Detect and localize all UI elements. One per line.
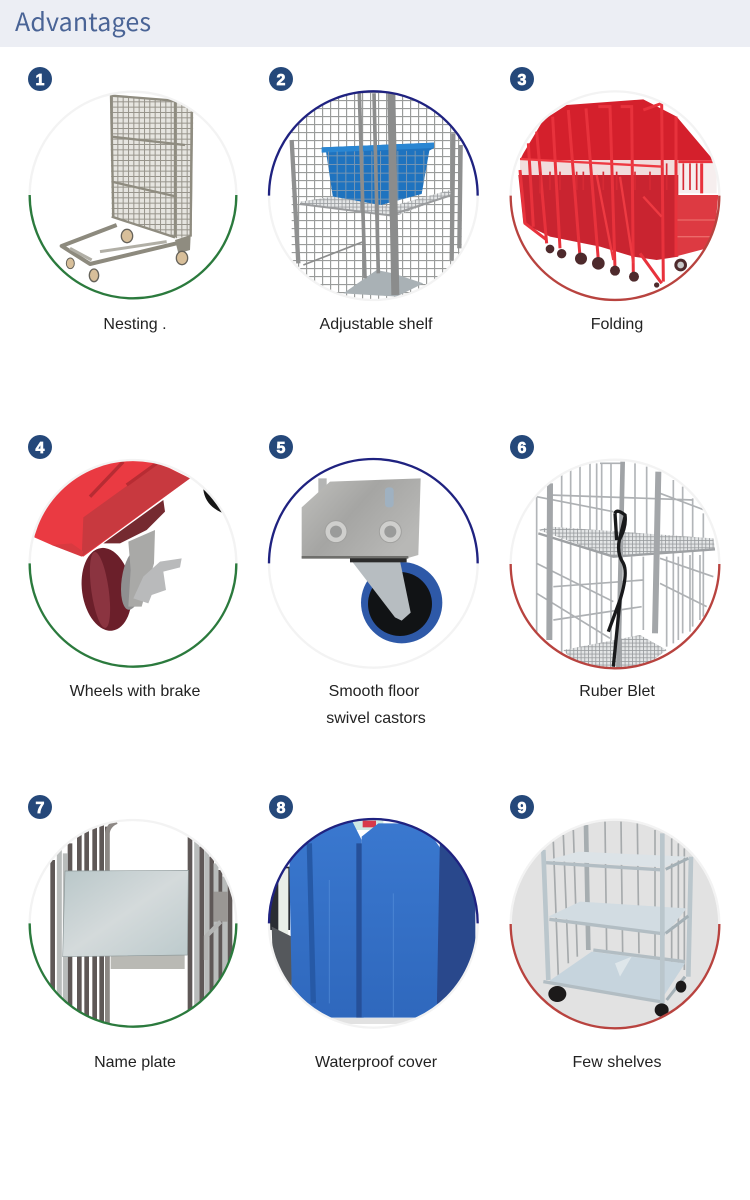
photo: metal name plate [53, 822, 230, 1030]
panel: rubber belt [510, 435, 719, 700]
photo: folded nesting cart [62, 95, 193, 282]
panel: wheels with brake [28, 435, 236, 700]
number badge 7 [28, 795, 52, 819]
number badge 2 [269, 67, 293, 91]
photo: red cart brake wheel [33, 457, 230, 634]
title: Advantages [15, 3, 151, 39]
number badge 8: 8 [277, 800, 286, 817]
label: Folding [591, 316, 643, 333]
ring [511, 460, 719, 668]
ring [30, 820, 236, 1027]
panel: name plate [28, 795, 236, 1071]
label: Nesting . [103, 316, 167, 333]
number badge 5 [269, 435, 293, 459]
label: Waterproof cover [315, 1054, 438, 1071]
ring [30, 92, 236, 298]
ring [269, 459, 478, 668]
label: Smooth floor [329, 683, 420, 700]
photo: blue swivel castor [302, 478, 442, 643]
photo: three-shelf cart [510, 820, 720, 1030]
ring [511, 91, 719, 300]
ring [511, 820, 719, 1028]
label: swivel castors [326, 710, 426, 727]
panel: adjustable shelf [269, 67, 478, 333]
photo: row of folded red carts [518, 99, 718, 288]
photo: blue crate on shelf [292, 90, 462, 300]
number badge 3 [510, 67, 534, 91]
number badge 6 [510, 435, 534, 459]
label [326, 683, 426, 727]
panel: few shelves [510, 795, 720, 1071]
number badge 1: 1 [36, 72, 45, 89]
number badge 3: 3 [518, 72, 527, 89]
ring [269, 91, 478, 300]
photo: wire cage with black strap [537, 462, 715, 670]
number badge 6: 6 [518, 440, 527, 457]
label: Adjustable shelf [320, 316, 433, 333]
number badge 7: 7 [36, 800, 45, 817]
ring [269, 819, 478, 1028]
label: Ruber Blet [579, 683, 655, 700]
number badge 9 [510, 795, 534, 819]
number badge 8 [269, 795, 293, 819]
photo: blue waterproof cover [267, 817, 480, 1030]
panel: nesting [28, 67, 236, 333]
number badge 4: 4 [36, 440, 45, 457]
number badge 4 [28, 435, 52, 459]
number badge 2: 2 [277, 72, 286, 89]
label: Name plate [94, 1054, 176, 1071]
number badge 5: 5 [277, 440, 286, 457]
label: Few shelves [573, 1054, 661, 1071]
header band [0, 0, 750, 47]
ring [30, 460, 236, 667]
panel: folding [510, 67, 719, 333]
panel: waterproof cover [267, 795, 480, 1071]
number badge 9: 9 [518, 800, 527, 817]
label: Wheels with brake [70, 683, 200, 700]
panel: swivel castors [269, 435, 478, 727]
number badge 1 [28, 67, 52, 91]
